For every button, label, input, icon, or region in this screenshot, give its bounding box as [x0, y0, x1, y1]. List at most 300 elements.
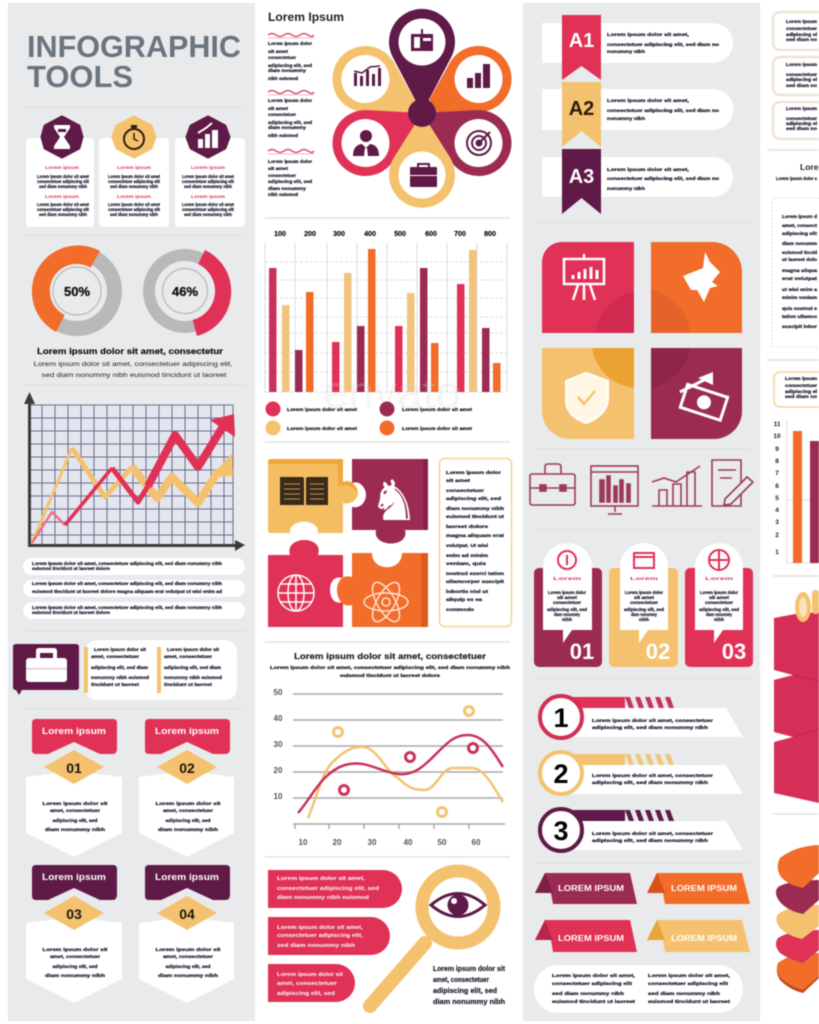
ribbon label wine: LOREM IPSUM: [558, 884, 624, 893]
bottom text pill: euismod tincidunt ut laoreet: [648, 999, 731, 1005]
callout: briefcase: tincidunt ut laoreet: [91, 682, 139, 688]
icon: chess knight: ♞: [369, 469, 419, 534]
red text tabs: Lorem ipsum dolor sit: [277, 972, 343, 978]
right column: chart note: sed diam no: [785, 394, 817, 400]
bar axis labels: 300: [333, 231, 345, 238]
panel: step 02: amet, consectetuer: [163, 808, 213, 814]
bars: [269, 249, 500, 392]
magnifier caption: diam nonummy nibh: [433, 997, 505, 1006]
icon: briefcase outline: [530, 464, 575, 505]
panel: step 03: adipiscing elit, sed: [52, 964, 98, 970]
panel: step 01: diam nonummy nibh: [45, 827, 105, 833]
card 02: consectetuer: [630, 600, 658, 606]
icon: bar chart: [467, 64, 490, 88]
card 03: Lorem: [705, 576, 733, 582]
ribbon list A2: [542, 82, 734, 147]
card 03: diam nonummy: [706, 612, 732, 618]
card text: Lorem ipsum dolor sit amet: [108, 174, 160, 180]
title: INFOGRAPHIC: [27, 29, 241, 64]
icon: bar chart hexagon: [187, 117, 229, 157]
card 03: nibh: [714, 617, 724, 623]
panel: third column background: [523, 3, 760, 1021]
right column: bar chart: 10: [773, 433, 781, 440]
red text tabs: diam nonummy nibh euismod: [277, 895, 369, 901]
yellow series: [32, 448, 233, 543]
card text: Lorem ipsum: [117, 165, 151, 171]
panel: step 01: Lorem ipsum dolor sit: [42, 801, 108, 807]
right column: bar chart: 2: [775, 532, 779, 539]
heading: Lorem Ipsum with notes: [268, 12, 344, 198]
right column: bar chart: 7: [775, 470, 779, 477]
card text: consectetuer adipiscing elit: [37, 179, 89, 185]
card text: consectetuer adipiscing elit: [37, 207, 89, 213]
heading: Lorem Ipsum with notes: diam nonummy: [268, 68, 306, 74]
red text tabs: Lorem ipsum dolor sit amet,: [277, 876, 366, 882]
chart title: euismod tincidunt ut laoreet dolore: [340, 673, 440, 679]
right column: bar chart: 4: [775, 507, 779, 514]
axis labels: 20: [333, 838, 342, 847]
right column: bordered notes: sed diam no: [786, 126, 817, 132]
icon: globe small: [709, 550, 729, 570]
text box next to puzzle: euismod tincidunt ut: [446, 514, 504, 520]
card 02: sit amet: [634, 595, 654, 601]
axis labels: 10: [274, 792, 283, 801]
panel: step 04: Lorem ipsum dolor sit: [156, 947, 221, 953]
puzzle: yellow book: [268, 459, 358, 533]
legend: Lorem ipsum dolor sit amet: [287, 426, 357, 432]
right column: dotted text box: minim veniam: [782, 295, 817, 301]
card text: sed diam nonummy nibh: [39, 212, 87, 218]
red series: [32, 414, 235, 543]
bottom text pill: [534, 965, 743, 1013]
red curve: [298, 735, 503, 813]
text box next to puzzle: adipiscing elit, sed: [446, 496, 501, 502]
right column: chart note: Lorem ipsum: [785, 376, 817, 382]
icon: atom: [364, 578, 408, 626]
ribbon label yellow: LOREM IPSUM: [671, 934, 737, 943]
donut chart 50%: [32, 245, 114, 332]
axis labels: 30: [368, 838, 377, 847]
coin label: [795, 590, 819, 622]
panel: step 02: adipiscing elit, sed: [166, 818, 211, 824]
card text: Lorem ipsum dolor sit amet: [37, 202, 89, 208]
card 01: 01: [570, 639, 594, 664]
magnifier caption: amet, consectetuer: [433, 975, 489, 984]
right column: dotted text box: [772, 198, 819, 347]
petal: plum top: [389, 9, 455, 113]
right column: dotted text box: amet, consect: [782, 223, 817, 229]
icon row: outline icons: [530, 460, 753, 514]
heading: Lorem Ipsum with notes: Lorem ipsum dolor: [268, 98, 312, 104]
tile: wine money: [651, 348, 742, 439]
ribbon list A2: consectetuer adipiscing elit, sed diam no: [607, 108, 719, 114]
heading: Lorem Ipsum with notes: nibh euismod: [268, 133, 298, 139]
callout: briefcase: adipiscing elit, sed diam: [164, 665, 221, 671]
text box next to puzzle: magna aliquam erat: [446, 533, 505, 539]
right column: heading: [776, 162, 819, 182]
card text: consectetuer adipiscing elit: [108, 179, 160, 185]
panel: step 03: diam nonummy nibh: [45, 973, 105, 979]
panel: step 02: diam nonummy nibh: [158, 827, 218, 833]
card 02: Lorem: [630, 576, 658, 582]
right column: dotted text box: erat volutpat: [782, 276, 817, 282]
card 01: adipiscing elit, sed: [547, 607, 587, 613]
red text tabs: Lorem ipsum dolor sit amet,: [277, 925, 364, 931]
text box next to puzzle: laoreet dolore: [446, 524, 488, 530]
card text: Lorem ipsum dolor sit amet: [37, 174, 89, 180]
numbered item 3: Lorem ipsum dolor sit amet, consectetuer: [592, 831, 713, 837]
card 03: Lorem ipsum dolor: [700, 590, 738, 596]
callout: briefcase: tincidunt ut laoreet: [164, 682, 212, 688]
icon: line bars: [354, 66, 381, 86]
icon: book: [280, 477, 328, 505]
right column: bordered notes: sed diam no: [786, 37, 817, 43]
tile: yellow shield: [542, 348, 634, 439]
callout: briefcase: nonummy nibh euismod: [91, 675, 149, 681]
numbered item 1: [540, 696, 743, 738]
right column: dotted text box: suscipit lobor: [782, 324, 817, 330]
panel: step 04: diam nonummy nibh: [158, 973, 218, 979]
ribbon list A3: Lorem ipsum dolor sit amet,: [607, 167, 690, 173]
callout: briefcase: amet, consectetuer: [91, 654, 139, 660]
right column: chart note: [774, 372, 819, 407]
heading: Lorem Ipsum with notes: consectetuer: [268, 55, 296, 61]
donut caption: Lorem ipsum dolor sit amet, consectetur: [37, 346, 224, 356]
panel: step 02: [139, 719, 234, 857]
card 02: diam nonummy: [631, 612, 657, 618]
panel: step 02: Lorem ipsum: [155, 726, 219, 737]
callout: briefcase: Lorem ipsum dolor sit: [167, 647, 219, 653]
card 01: diam nonummy: [554, 612, 580, 618]
chart title: [270, 651, 510, 679]
bottom text pill: Lorem ipsum dolor sit amet,: [648, 973, 731, 979]
right column: dotted text box: magna aliqua: [782, 268, 817, 274]
numbered item 3: [540, 809, 743, 851]
card text: Lorem ipsum dolor sit amet: [108, 202, 160, 208]
petal: yellow left: [320, 34, 439, 141]
card text: Lorem ipsum: [45, 165, 79, 171]
icon: megaphone: [683, 252, 720, 302]
right column: bar chart: 3: [775, 519, 779, 526]
panel: step 04: Lorem ipsum: [155, 872, 219, 883]
icon: chart outline: [652, 466, 702, 506]
text box next to puzzle: aliquip ex ea: [446, 597, 482, 603]
ribbon list A1: A1: [569, 30, 594, 52]
axis labels: 10: [299, 838, 308, 847]
right column: bordered notes: consectetuer: [786, 26, 817, 32]
legend: Lorem ipsum dolor sit amet: [402, 407, 472, 413]
ribbon list A1: consectetuer adipiscing elit, sed diam no: [607, 42, 719, 48]
pill notes: [23, 558, 245, 619]
icon: stopwatch: [113, 117, 155, 157]
card 01: consectetuer: [553, 600, 581, 606]
panel: step 01: [26, 719, 122, 857]
puzzle pieces: [268, 459, 428, 627]
pill notes: Lorem ipsum dolor sit amet, consectetuer adipiscing elit, sed diam nonummy nibh: [32, 561, 222, 567]
heading: Lorem Ipsum with notes: sit amet: [268, 49, 288, 55]
card 03: consectetuer: [705, 600, 733, 606]
curve chart: [270, 651, 510, 847]
line chart with arrows: [24, 392, 245, 551]
ribbon list A2: nonummy nibh: [607, 116, 645, 122]
text box next to puzzle: commodo: [446, 607, 474, 613]
numbered item 3: 3: [553, 816, 569, 846]
bar axis labels: 500: [394, 231, 406, 238]
chart title: Lorem ipsum dolor sit amet, consectetuer adipiscing elit, sed diam nonummy nibh: [270, 665, 510, 671]
text box next to puzzle: consectetuer: [446, 488, 484, 494]
right column: bordered notes: adipiscing el: [786, 77, 817, 83]
card text: consectetuer adipiscing elit: [108, 207, 160, 213]
petal: red left: [321, 84, 437, 188]
pill notes: euismod tincidunt ut laoreet dolore magna aliquam erat volutpat ut wisi enim ad: [32, 589, 222, 595]
magnifier caption: [433, 964, 505, 1006]
axis labels: 20: [274, 766, 283, 775]
axis labels: 40: [274, 714, 283, 723]
panel: step 03: 03: [66, 906, 82, 922]
axis labels: 50: [438, 838, 447, 847]
heading: Lorem Ipsum with notes: adipiscing elit, sed: [268, 120, 312, 126]
card 01: Lorem ipsum dolor: [548, 590, 586, 596]
magnifier with eye: [370, 871, 494, 1006]
right column: dotted text box: euismod tincid: [782, 250, 817, 256]
heading: Lorem Ipsum with notes: diam nonummy: [268, 125, 306, 131]
right column: dotted text box: adipiscing elit: [782, 231, 817, 237]
heading: Lorem Ipsum with notes: adipiscing elit, sed: [268, 63, 312, 69]
card text: sed diam nonummy nibh: [184, 184, 232, 190]
ribbon label yellow: [647, 920, 750, 952]
ribbon label red: [535, 920, 637, 952]
tile: red presentation: [542, 242, 634, 333]
numbered item 2: 2: [553, 759, 569, 789]
panel: step 03: amet, consectetuer: [50, 954, 100, 960]
icon: id board: [411, 29, 433, 51]
card text: consectetuer adipiscing elit: [182, 179, 234, 185]
right column: bordered notes: adipiscing el: [786, 121, 817, 127]
axis labels: 40: [404, 838, 413, 847]
bar axis labels: 700: [454, 231, 466, 238]
text box next to puzzle: lobortis nisl ut: [446, 589, 489, 595]
bottom text pill: euismod tincidunt ut laoreet: [552, 999, 636, 1005]
right column: dotted text box: quis nostrud e: [782, 306, 817, 312]
heading: Lorem Ipsum with notes: nibh euismod: [268, 192, 298, 198]
panel: step 04: amet, consectetuer: [163, 954, 213, 960]
callout: briefcase: [13, 640, 237, 700]
card 03: sit amet: [709, 595, 729, 601]
card text: Lorem ipsum: [191, 194, 225, 200]
icon: banknote and arrow: [680, 372, 728, 420]
red text tabs: adipiscing elit, sed: [277, 991, 335, 997]
ribbon list A3: [542, 149, 733, 214]
ribbon list A3: consectetuer adipiscing elit, sed diam no: [607, 176, 719, 182]
data points: [334, 706, 478, 816]
right column: layered hearts: [776, 845, 819, 993]
panel: step 01: amet, consectetuer: [50, 808, 100, 814]
right column: bordered notes: sed diam no: [786, 83, 817, 89]
numbered item 1: Lorem ipsum dolor sit amet, consectetuer: [592, 718, 713, 724]
right column: bar chart: 9: [775, 446, 779, 453]
card text: Lorem ipsum dolor sit amet: [182, 174, 234, 180]
numbered item 1: 1: [553, 703, 569, 733]
heading: Lorem Ipsum with notes: nibh euismod: [268, 76, 298, 82]
card 02: adipiscing elit, sed: [624, 607, 664, 613]
icon: eye: [431, 894, 485, 916]
icon: businessman: [353, 130, 379, 156]
heading: Lorem Ipsum with notes: sit amet: [268, 106, 288, 112]
panel: step 03: [26, 865, 122, 1003]
heading: Lorem Ipsum with notes: diam nonummy: [268, 186, 306, 192]
text box next to puzzle: Lorem ipsum dolor: [446, 470, 501, 476]
yellow curve: [308, 747, 503, 818]
heading: Lorem Ipsum with notes: Lorem ipsum dolor: [268, 41, 312, 47]
pill notes: euismod tincidunt ut laoreet dolore: [32, 610, 110, 616]
text box next to puzzle: [440, 458, 512, 626]
right column: bordered notes: Lorem ipsum: [786, 19, 817, 25]
right column: dotted text box: diam nonumm: [782, 241, 817, 247]
panel: step 04: adipiscing elit, sed: [166, 964, 211, 970]
right column: chart note: adipiscing el: [785, 389, 817, 395]
magnifier caption: Lorem ipsum dolor sit: [433, 964, 505, 973]
text box next to puzzle: sit amet: [446, 478, 471, 484]
right column: bordered notes: consectetuer: [786, 116, 817, 122]
bottom text pill: consectetuer adipiscing elit: [648, 981, 728, 987]
axis labels: 60: [472, 838, 481, 847]
heading: Lorem Ipsum with notes: adipiscing elit, sed: [268, 179, 312, 185]
axes: [24, 392, 245, 551]
text box next to puzzle: diam nonummy nibh: [446, 506, 504, 512]
pill notes: Lorem ipsum dolor sit amet, consectetuer adipiscing elit, sed diam nonummy nibh: [32, 581, 222, 587]
icon: globe: [278, 575, 314, 611]
ribbon list A2: A2: [569, 98, 594, 120]
bar chart: [265, 231, 507, 436]
panel: step 01: Lorem ipsum: [42, 726, 106, 737]
icon: calendar: [634, 553, 654, 568]
panel: step 02: 02: [179, 760, 195, 776]
ribbon list A1: nonummy nibh: [607, 49, 645, 55]
card text: Lorem ipsum: [191, 165, 225, 171]
ribbon label wine: [535, 873, 637, 904]
petal: orange right: [405, 34, 524, 141]
card text: sed diam nonummy nibh: [110, 184, 158, 190]
legend: Lorem ipsum dolor sit amet: [402, 426, 472, 432]
pill notes: Lorem ipsum dolor sit amet, consectetuer adipiscing elit, sed diam nonummy nibh: [32, 605, 222, 611]
icon: hourglass: [42, 117, 82, 157]
bar axis labels: 100: [274, 231, 286, 238]
callout: briefcase: nonummy nibh euismod: [164, 675, 222, 681]
ribbon list A2: Lorem ipsum dolor sit amet,: [607, 98, 690, 104]
card text: sed diam nonummy nibh: [39, 184, 87, 190]
bottom text pill: Lorem ipsum dolor sit amet,: [552, 973, 636, 979]
red text tabs: sed diam nonummy nibh: [277, 943, 355, 949]
right column: bar chart: 5: [775, 495, 779, 502]
callout: briefcase: amet, consectetuer: [164, 654, 212, 660]
legend: Lorem ipsum dolor sit amet: [287, 407, 357, 413]
axis labels: 30: [274, 740, 283, 749]
ribbon list A1: Lorem ipsum dolor sit amet,: [607, 32, 690, 38]
card 02: nibh: [639, 617, 649, 623]
title: [27, 29, 241, 94]
petal: yellow bottom: [389, 113, 455, 208]
text box next to puzzle: enim ad minim: [446, 553, 488, 559]
right column: heading: Lore: [800, 162, 819, 172]
numbered item 2: adipiscing elit, sed diam nonummy nibh: [592, 780, 708, 786]
card 02: Lorem ipsum dolor: [625, 590, 663, 596]
card 03: [685, 543, 753, 667]
ribbon list A3: A3: [569, 166, 594, 188]
right column: bordered notes: consectetuer: [786, 72, 817, 78]
red text tabs: [268, 870, 402, 1002]
right column: bar chart: 11: [774, 421, 781, 428]
chart title: Lorem ipsum dolor sit amet, consectetuer: [294, 651, 487, 661]
title: TOOLS: [27, 59, 133, 94]
icon: document pencil: [712, 460, 753, 506]
donut caption: Lorem ipsum dolor sit amet, consectetuer adipiscing elit,: [34, 361, 233, 368]
donut caption: [34, 346, 233, 379]
ribbon label red: LOREM IPSUM: [558, 934, 624, 943]
donut caption: sed diam nonummy nibh euismod tincidunt ut laoreet: [42, 372, 227, 379]
right column: bar chart: 6: [775, 483, 779, 490]
card 02: 02: [646, 639, 670, 664]
ribbon label orange: LOREM IPSUM: [671, 884, 737, 893]
bottom text pill: sed diam nonummy nibh: [552, 991, 624, 997]
bar axis labels: 200: [304, 231, 316, 238]
heading: Lorem Ipsum with notes: Lorem ipsum dolor: [268, 159, 312, 165]
ribbon list A1: [542, 15, 733, 80]
card 02: [609, 543, 678, 667]
callout: briefcase: adipiscing elit, sed diam: [91, 665, 148, 671]
watermark: envato: [323, 366, 461, 418]
magnifier caption: adipiscing elit, sed: [433, 986, 497, 995]
card text: [37, 165, 234, 218]
right column: bar chart: 8: [775, 458, 779, 465]
card text: sed diam nonummy nibh: [110, 212, 158, 218]
bar axis labels: 600: [425, 231, 437, 238]
card 03: adipiscing elit, sed: [699, 607, 739, 613]
right column: dotted text box: tation ullamco: [782, 314, 817, 320]
right column: 3D red stack: [774, 590, 819, 803]
icon: presentation board: [564, 254, 604, 300]
axis labels: 50: [274, 688, 283, 697]
ribbon label orange: [647, 873, 750, 904]
donut chart 46%: [149, 250, 231, 336]
numbered item 2: [540, 752, 743, 794]
axis labels: [274, 688, 481, 847]
panel: step 01: adipiscing elit, sed: [52, 818, 98, 824]
card text: consectetuer adipiscing elit: [182, 207, 234, 213]
icon: shield: [566, 373, 608, 423]
right column: bar chart: 1: [775, 549, 779, 556]
card text: Lorem ipsum dolor sit amet: [182, 202, 234, 208]
card 01: [534, 543, 602, 667]
panel: left column background: [8, 3, 255, 1021]
heading: Lorem Ipsum with notes: sit amet: [268, 166, 288, 172]
right column: chart note: consectetuer: [785, 383, 817, 389]
text box next to puzzle: volutpat. Ut wisi: [446, 543, 488, 549]
pill notes: euismod tincidunt ut laoreet dolore: [32, 566, 110, 572]
heading: Lorem Ipsum with notes: consectetuer: [268, 112, 296, 118]
right column: bordered notes: [773, 12, 819, 139]
donut chart 46%: 46%: [172, 284, 198, 299]
red text tabs: amet, consectetuer: [277, 981, 337, 987]
right column: dotted text box: ut laoreet dolo: [782, 257, 817, 263]
red text tabs: consectetuer adipiscing elit, sed: [277, 886, 379, 892]
right column: bordered notes: Lorem ipsum: [786, 106, 817, 112]
right column: bordered notes: Lorem ipsum: [786, 62, 817, 68]
panel: step 02: Lorem ipsum dolor sit: [156, 801, 221, 807]
flower diagram: [320, 9, 524, 208]
puzzle: red globe: [268, 540, 343, 627]
text box next to puzzle: ullamcorper suscipit: [446, 579, 504, 585]
icon: monitor chart: [591, 466, 638, 514]
